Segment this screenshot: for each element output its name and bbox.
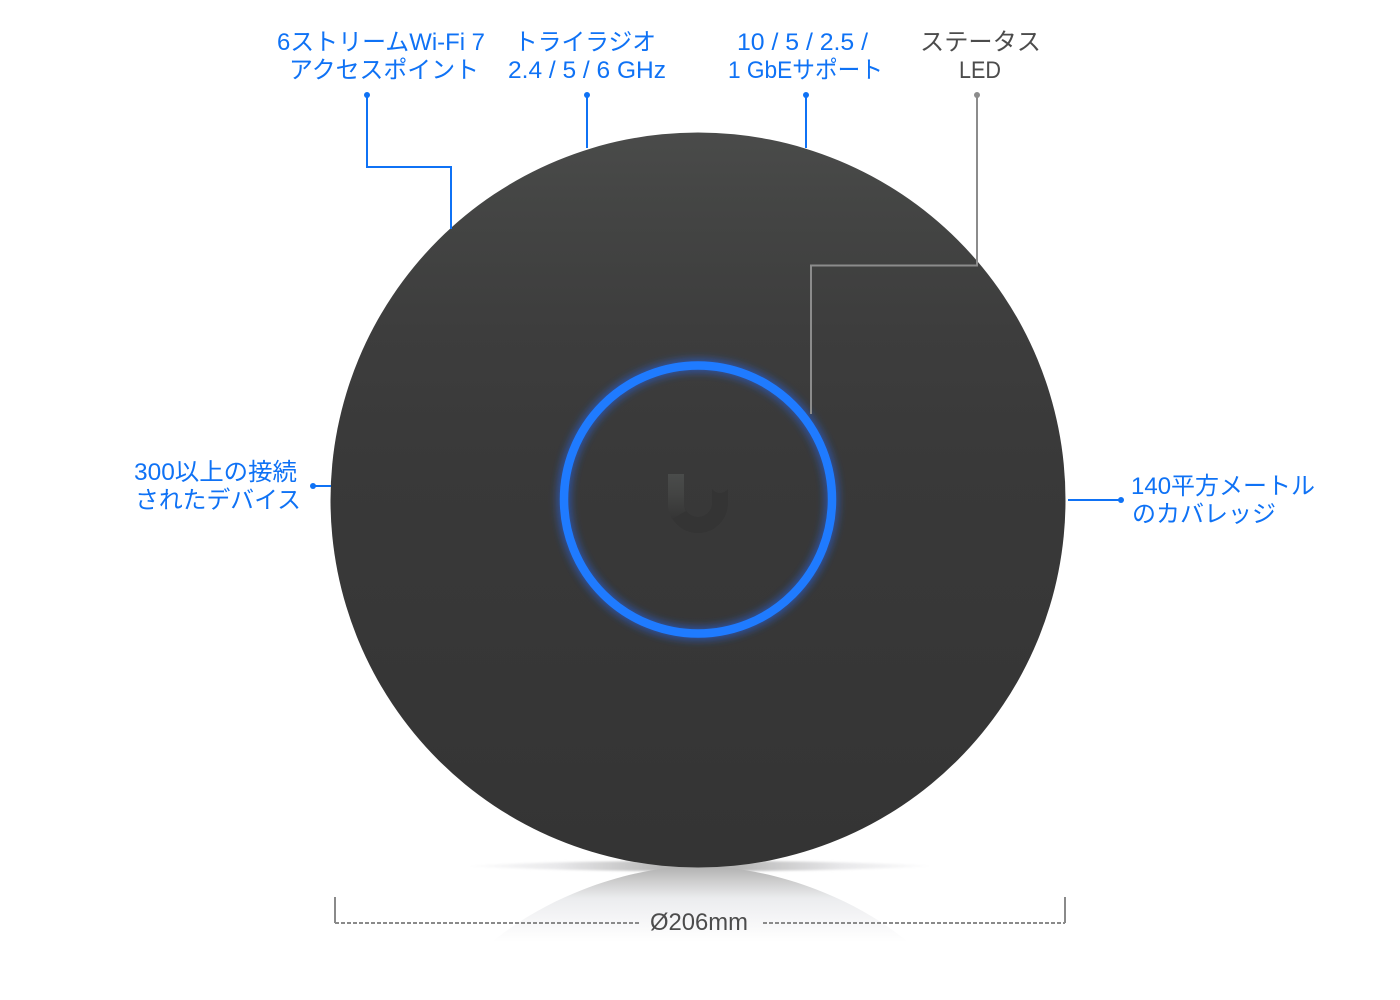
label: 6-stream Wi-Fi 7 access point [277,29,485,84]
label: status LED: ステータス [920,29,1041,56]
label: tri-radio bands: 2.4 / 5 / 6 GHz [508,57,666,84]
label: GbE support [728,29,883,84]
leader line: connected devices [310,483,331,489]
leader line: GbE support [803,92,809,148]
label: GbE support: 1 GbEサポート [728,57,883,84]
leader line: 6-stream Wi-Fi 7 [364,92,451,229]
dimension bracket [335,897,1065,923]
label: connected devices [134,459,301,514]
label: coverage [1131,473,1315,528]
dimension label: Ø206mm [650,909,748,936]
leader line: coverage [1068,497,1124,503]
leader line: status LED [811,92,980,414]
label: GbE support: 10 / 5 / 2.5 / [737,29,868,56]
device disc [330,132,1066,868]
label: tri-radio bands [508,29,666,84]
label: 6-stream Wi-Fi 7 access point: アクセスポイント [289,57,479,84]
icon: U logo [668,474,728,533]
status LED ring [564,366,832,634]
label: coverage: のカバレッジ [1132,501,1276,528]
label: connected devices: されたデバイス [135,487,301,514]
label: status LED: LED [959,57,1001,84]
label: tri-radio bands: トライラジオ [514,29,656,56]
label: connected devices: 300以上の接続 [134,459,297,486]
label: 6-stream Wi-Fi 7 access point: 6ストリームWi-Fi 7 [277,29,485,56]
leader line: tri-radio [584,92,590,148]
reflection under device [462,861,938,942]
label: coverage: 140平方メートル [1131,473,1315,500]
label: status LED [920,29,1041,84]
